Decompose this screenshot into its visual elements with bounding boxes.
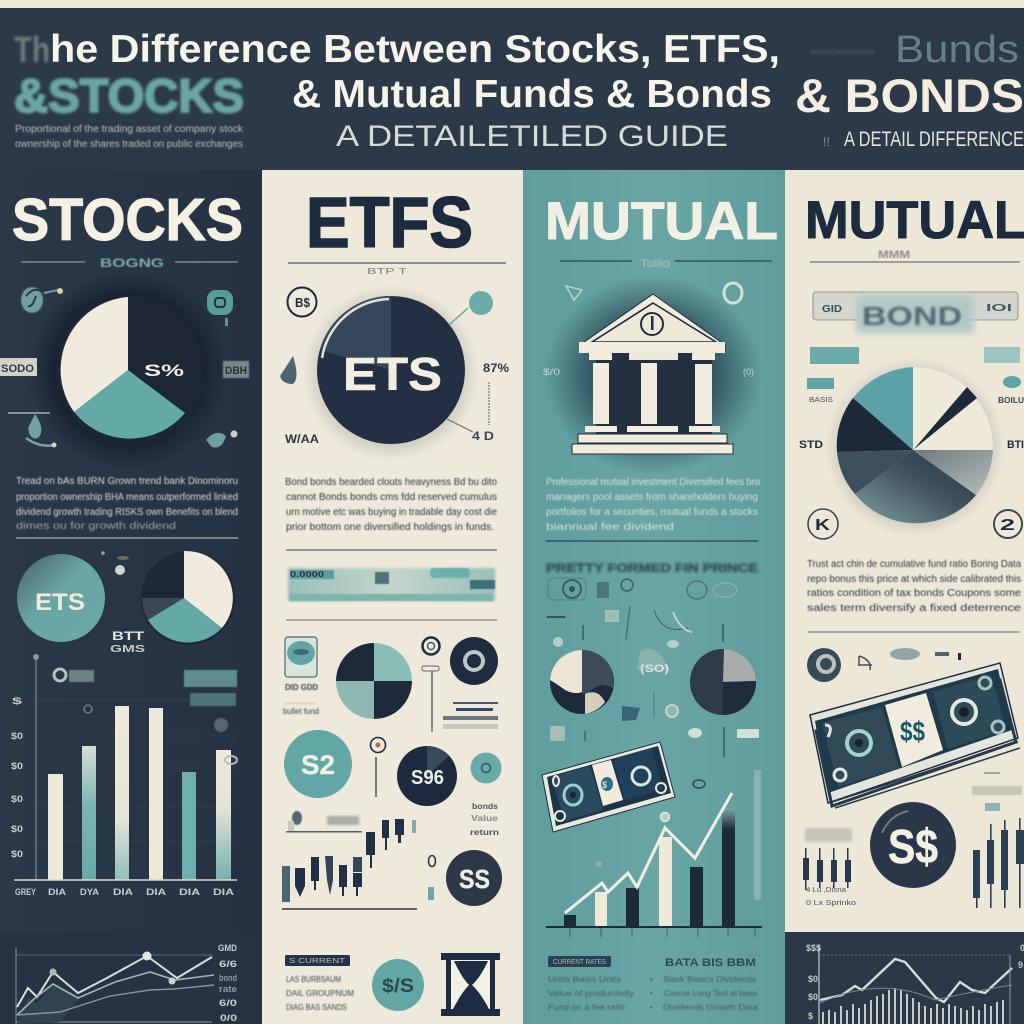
side labels (470, 802, 499, 837)
footer panel: stocks line chart (0, 932, 262, 1024)
banner (288, 568, 495, 601)
candlesticks left: 0 Lx Sprinko (806, 900, 856, 907)
body text: bonds: sales term diversify a fixed deterrence (807, 603, 1022, 614)
axis labels: $0 (11, 794, 23, 804)
footer note: mutual: Units Basis Units (548, 975, 621, 984)
pie chart: mutual left (550, 650, 614, 714)
panel: bonds (785, 170, 1024, 1024)
subtitle: A DETAILETILED GUIDE (336, 120, 728, 153)
icons around ETS: 4 D (472, 429, 494, 443)
footer note: ETFs: LAS BURBSAUM (286, 975, 341, 984)
body text: mutual: biannual fee dividend (546, 522, 674, 533)
axis labels: $0 (11, 849, 23, 859)
bars (48, 706, 231, 880)
title (50, 28, 780, 116)
SS badge (446, 850, 502, 906)
icon: dollar coin (870, 802, 956, 888)
pie chart: stocks: S% (144, 361, 184, 380)
banner: BOND: BOILU (998, 396, 1024, 405)
ETS label (101, 551, 146, 655)
candlestick chart (282, 811, 436, 909)
footer note: ETFs: S CURRENT (289, 958, 346, 965)
S5 badge: $/S (382, 976, 414, 997)
banner: BOND: BOND (862, 301, 962, 331)
app icon and labels (283, 637, 319, 716)
icons around pie: DBH (225, 365, 247, 377)
sub label: BTP T (367, 267, 407, 276)
body text: bonds (807, 559, 1022, 614)
temple side icons: $/0 (543, 367, 560, 377)
ghost heading left: ownership of the shares traded on public exchanges (15, 139, 243, 150)
sub label: Tollio (640, 258, 670, 270)
ETS badge: ETS (35, 589, 85, 616)
body text: stocks: dividend growth trading RISKS own Benefits on blend (16, 507, 238, 518)
footer note: mutual: Course Long Test at base (664, 989, 758, 998)
axis labels: $0 (11, 761, 23, 771)
pie chart: ETS (141, 551, 235, 645)
icon: dollar coin: S$ (888, 821, 938, 874)
footer panel: bonds line chart: 9 (1018, 960, 1023, 970)
panel: ETFs (262, 170, 523, 1024)
footer panel: bonds line chart: $ (808, 1011, 813, 1021)
pin (370, 738, 386, 797)
footer panel: stocks line chart: 0/0 (220, 1013, 237, 1023)
center badge and pins (550, 649, 759, 788)
heading: STOCKS: STOCKS (12, 187, 243, 253)
ghost heading left: &STOCKS (14, 69, 244, 122)
ETS circle chart: ETS (343, 348, 442, 400)
footer panel: stocks line chart: 6/0 (219, 998, 237, 1008)
temple side icons: (0) (743, 367, 754, 377)
axis labels: GREY (15, 887, 36, 897)
banner: BOND: GID (822, 304, 842, 315)
candlesticks left: 4 Lu ,Disna (806, 887, 846, 894)
body text: ETFs: prior bottom one diversified holdings in funds. (286, 522, 494, 533)
candlesticks left (803, 828, 856, 907)
top cream strip (0, 0, 1024, 8)
footer note: mutual: Fund on a fee ratio (548, 1003, 626, 1012)
small table (443, 702, 498, 729)
pie labels and icons: STD (799, 439, 823, 451)
pie chart: mutual right (690, 649, 756, 715)
heading right: Bunds (895, 29, 1019, 71)
axis labels: $0 (11, 731, 23, 741)
ring icon and stem (422, 638, 440, 732)
body text: stocks: Tread on bAs BURN Grown trend bank Dinominoru (16, 476, 238, 487)
axis labels: DIA (113, 887, 134, 897)
pie labels and icons: 2 (1000, 517, 1015, 534)
icon: bank temple (545, 275, 761, 475)
temple side icons (543, 283, 754, 377)
side labels: Value (471, 814, 499, 823)
pie chart: bonds (825, 357, 1005, 537)
ETS badge (17, 554, 105, 642)
body text: stocks: dimes ou for growth dividend (16, 521, 176, 532)
footer panel: bonds line chart: $$$ (806, 943, 821, 953)
quarter pie (336, 643, 412, 719)
S96 badge (397, 746, 457, 806)
teal dot (470, 752, 502, 784)
body text: mutual (546, 477, 760, 533)
garbled diagram strip (546, 561, 758, 648)
footer note: mutual (548, 956, 759, 1012)
body text: ETFs: urn motive etc was buying in tradable day cost die (286, 507, 497, 518)
body text: stocks: proportion ownership BHA means outperformed linked (16, 492, 238, 503)
ETS circle chart (303, 285, 479, 461)
sub label: MMM (878, 249, 910, 261)
sub label: BOGNG (100, 256, 164, 270)
icons around pie (0, 287, 249, 448)
body text: ETFs: cannot Bonds bonds cms fdd reserved cumulus (286, 492, 497, 503)
heading right (795, 29, 1024, 151)
banner: BOND: IOI (986, 303, 1012, 314)
icon: hourglass (441, 953, 500, 1016)
footer note: mutual: • (650, 989, 653, 998)
footer note: ETFs: DIAG BAS SANDS (286, 1003, 347, 1012)
footer panel: stocks line chart: GMD (218, 943, 237, 953)
ETS label: BTT (112, 629, 145, 643)
body text: ETFs: Bond bonds bearded clouts heavyness Bd bu dito (285, 477, 497, 488)
S2 badge (284, 730, 352, 798)
heading right: & BONDS (795, 69, 1024, 122)
app icon and labels: bullet fund (283, 707, 319, 716)
footer panel: bonds line chart: $0 (808, 974, 818, 984)
icons around pie: SODO (1, 363, 34, 375)
footer note: mutual: • (650, 1003, 653, 1012)
volume bars (823, 988, 1003, 1024)
body text: bonds: ratios condition of tax bonds Coupons some (807, 588, 1021, 599)
axis labels: DYA (80, 887, 100, 897)
axis labels: DIA (179, 887, 201, 897)
SS badge: SS (459, 864, 490, 894)
heading right: !! (823, 135, 830, 149)
top right marker (972, 772, 1022, 811)
footer panel: stocks line chart: rate (219, 984, 237, 994)
icons around ETS (280, 288, 509, 446)
header band (0, 8, 1024, 170)
icons around ETS: B$ (295, 295, 311, 310)
center badge and pins: (SO) (640, 663, 669, 675)
ETS label: GMS (110, 644, 146, 655)
footer note: mutual: Value of productivity (548, 989, 634, 998)
axis labels: $0 (11, 824, 23, 834)
heading: ETFS: ETFS (306, 184, 473, 263)
icon: dollar bill large (810, 663, 1020, 808)
body text: mutual: portfolios for a securities, mutual funds a stocks (546, 507, 758, 518)
icons around ETS: 87% (483, 361, 509, 375)
app icon and labels: DID GDD (285, 683, 318, 692)
heading right: ~~~~~~~~ (810, 44, 875, 59)
footer note: mutual: CURRENT RATES (553, 959, 606, 966)
side labels: bonds (472, 802, 499, 811)
S2 badge: S2 (301, 750, 335, 780)
footer panel: stocks line chart: bond (219, 973, 237, 983)
S96 badge: S96 (411, 767, 444, 789)
body text: stocks (16, 476, 238, 532)
pie labels and icons: K (815, 517, 831, 534)
side labels: return (470, 828, 499, 837)
footer panel: bonds line chart: $0 (808, 992, 818, 1002)
body text: ETFs (285, 477, 497, 533)
S5 badge (372, 959, 424, 1011)
heading: MUTUAL: MUTUAL (545, 192, 778, 251)
ghost heading left (14, 29, 244, 150)
footer note: ETFs: DAIL GROUPNUM (286, 989, 354, 998)
axis labels: DIA (213, 887, 235, 897)
ghost heading left: Proportional of the trading asset of company stock (15, 124, 244, 135)
axis labels: DIA (48, 887, 67, 897)
icons around ETS: W/AA (285, 432, 319, 446)
axis labels: DIA (146, 887, 167, 897)
title: & Mutual Funds & Bonds (292, 73, 772, 116)
icon: dollar bill small: $ (602, 780, 607, 790)
title: he Difference Between Stocks, ETFS, (50, 28, 780, 71)
footer note: mutual: • (650, 975, 653, 984)
chart callouts (54, 669, 237, 764)
banner: BOND (807, 292, 1024, 405)
icon: dollar bill small (542, 742, 675, 832)
panel: stocks (0, 170, 262, 1024)
bar chart: stocks (11, 654, 237, 897)
footer note: ETFs (285, 955, 354, 1012)
footer note: mutual: Dividends Growth Data (663, 1003, 759, 1012)
banner: BOND: BASIS (809, 397, 833, 404)
app icon and labels: ........... (284, 697, 316, 706)
footer panel: stocks line chart: 6/6 (219, 959, 237, 969)
icon: dollar bill large: $$ (900, 716, 925, 747)
combo chart: mutual (546, 770, 762, 937)
panel: mutual funds (523, 170, 785, 1024)
banner: 0.0000 (290, 570, 325, 579)
navy ring badge (450, 637, 498, 685)
footer note: mutual: BATA BIS BBM (665, 957, 756, 969)
garbled diagram strip: PRETTY FORMED FIN PRINCE (546, 561, 758, 575)
footer note: mutual: Bank Basics Dividends (664, 975, 756, 984)
heading: MUTUAL (bonds): MUTUAL (805, 191, 1024, 250)
body text: mutual: Professional mutual investment Diversified fees bro (546, 477, 760, 488)
icons row (807, 648, 961, 682)
ghost heading left: Th (14, 29, 50, 70)
candlesticks right (973, 818, 1024, 908)
pie labels and icons (799, 439, 1024, 539)
axis labels: $ (12, 696, 22, 706)
body text: bonds: repo bonus this price at which side calibrated this (807, 574, 1021, 585)
axis labels (11, 696, 235, 897)
pie chart: stocks (28, 270, 228, 470)
body text: mutual: managers pool assets from shareholders buying (546, 492, 758, 503)
footer panel: bonds line chart (785, 932, 1024, 1024)
